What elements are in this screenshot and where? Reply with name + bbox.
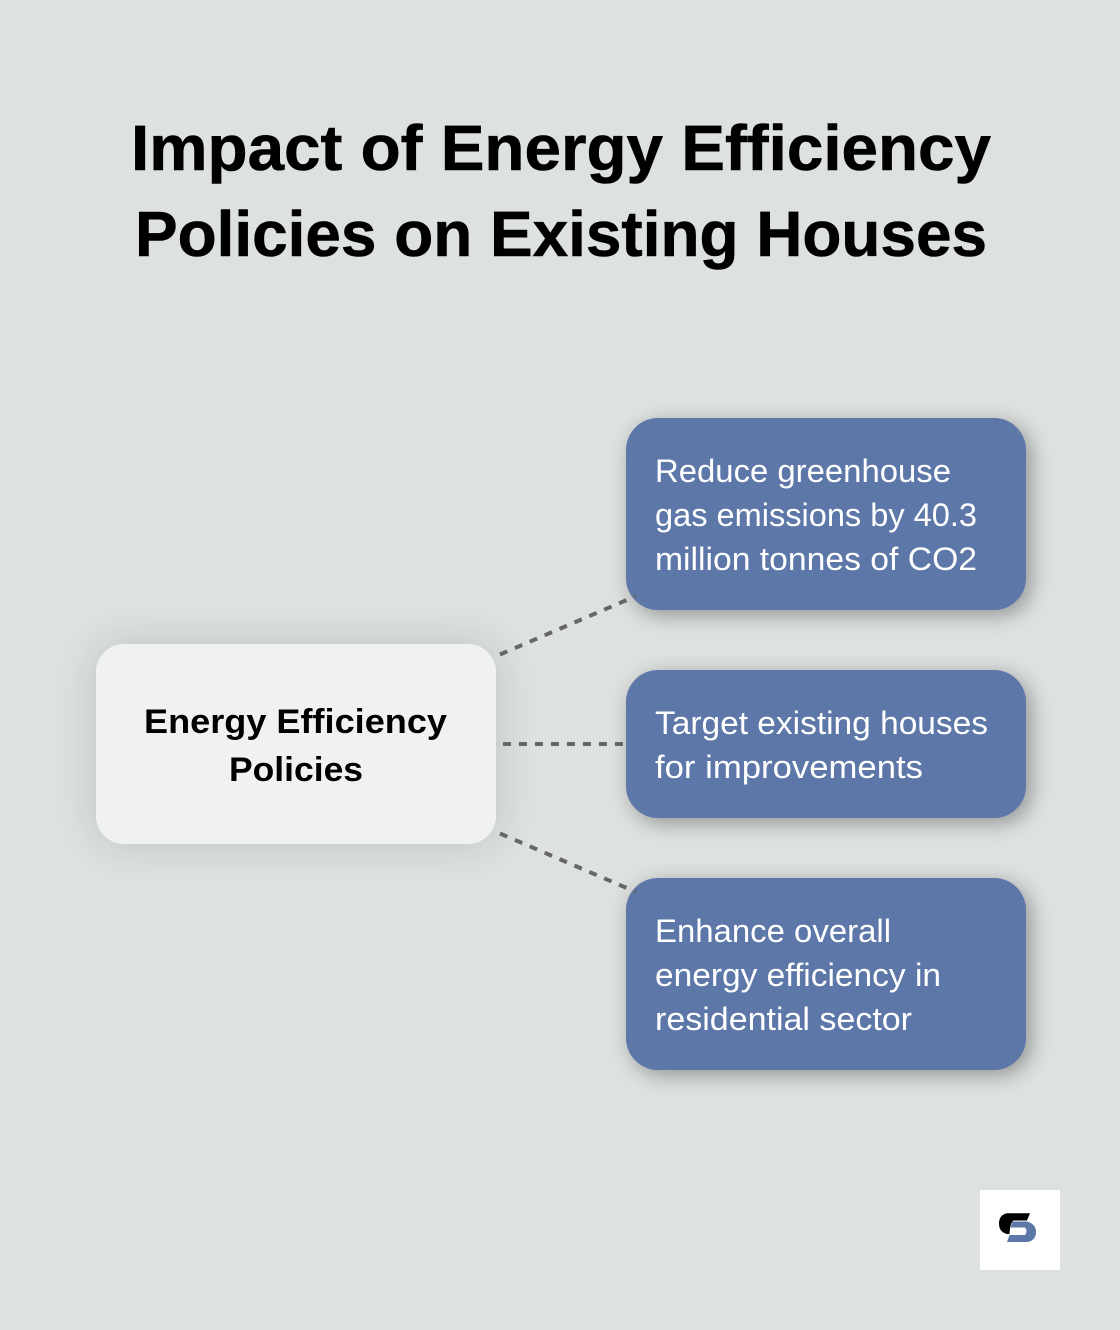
text: enhance efficiency bbox=[655, 913, 941, 1037]
arrow: connector to emissions bbox=[500, 596, 636, 654]
text: reduce emissions: Reduce greenhouse bbox=[655, 453, 951, 489]
title: Policies on Existing Houses bbox=[135, 198, 987, 270]
central box label: Policies bbox=[229, 751, 363, 789]
arrow: connector to efficiency bbox=[500, 834, 636, 892]
panel: enhance efficiency background bbox=[626, 878, 1026, 1070]
text: reduce emissions bbox=[655, 453, 977, 577]
text: enhance efficiency: Enhance overall bbox=[655, 913, 891, 949]
text: reduce emissions: million tonnes of CO2 bbox=[655, 541, 977, 577]
title bbox=[131, 112, 991, 270]
title: Impact of Energy Efficiency bbox=[131, 112, 991, 184]
text: target houses: Target existing houses bbox=[655, 705, 988, 741]
central box label bbox=[144, 703, 447, 789]
text: enhance efficiency: energy efficiency in bbox=[655, 957, 941, 993]
text: target houses bbox=[655, 705, 988, 785]
arrow: connector to houses bbox=[503, 742, 624, 746]
panel: target houses background bbox=[626, 670, 1026, 818]
panel: reduce emissions background bbox=[626, 418, 1026, 610]
text: reduce emissions: gas emissions by 40.3 bbox=[655, 497, 977, 533]
central box label: Energy Efficiency bbox=[144, 703, 447, 741]
central box: Energy Efficiency Policies bbox=[96, 644, 496, 844]
icon: logo bbox=[980, 1190, 1060, 1270]
text: target houses: for improvements bbox=[655, 749, 923, 785]
text: enhance efficiency: residential sector bbox=[655, 1001, 912, 1037]
